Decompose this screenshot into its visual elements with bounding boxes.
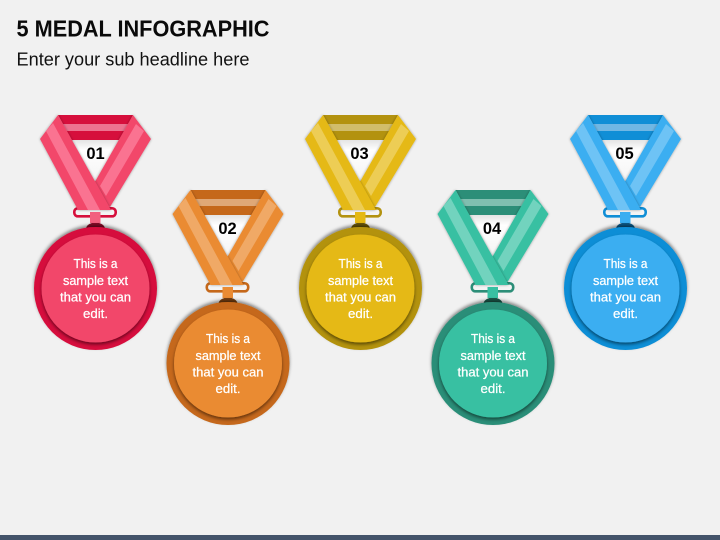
footer bar [0, 535, 720, 540]
medal text 04: edit. [480, 381, 506, 396]
medal text 05: that you can [590, 290, 661, 304]
medal text 02: edit. [216, 381, 240, 396]
medal 02 orange [166, 190, 290, 425]
medal text 02: that you can [192, 364, 264, 380]
medal text 04: sample text [460, 348, 526, 363]
medal 04 green [432, 190, 554, 425]
medal text 01: edit. [83, 306, 108, 321]
number 04: 04 [483, 220, 502, 238]
medal 01 red [34, 115, 157, 350]
medal text 01: that you can [60, 290, 131, 304]
medal 05 blue [564, 115, 687, 350]
medal text 03 [325, 256, 396, 321]
medal text 03: This is a [338, 256, 383, 271]
ribbon 02 [172, 190, 284, 291]
medal text 02: This is a [206, 331, 251, 346]
medal text 05: sample text [593, 273, 658, 288]
number 02: 02 [218, 220, 237, 238]
medal 03 yellow [299, 115, 422, 350]
medal text 05: edit. [613, 306, 638, 321]
medal disc 04 [432, 287, 554, 425]
number 03: 03 [350, 145, 369, 163]
title: 5 MEDAL INFOGRAPHIC [16, 16, 270, 42]
medal text 02 [192, 331, 264, 396]
medal disc 01 [34, 212, 157, 350]
medal text 02: sample text [196, 348, 261, 363]
medal text 03: that you can [325, 290, 396, 304]
medal text 05: This is a [604, 256, 648, 271]
number 05: 05 [615, 145, 634, 163]
medal text 01: sample text [63, 273, 128, 288]
medal disc 03 [299, 212, 422, 350]
medal disc 05 [564, 212, 687, 350]
medal text 03: sample text [328, 273, 393, 288]
medal text 01 [60, 256, 131, 321]
medal text 05 [590, 256, 661, 321]
number 01: 01 [86, 145, 105, 163]
medal text 04: that you can [458, 364, 528, 380]
ribbon 05 [570, 115, 681, 216]
medal text 03: edit. [348, 306, 373, 321]
ribbon 03 [305, 115, 416, 216]
ribbon 01 [40, 115, 151, 216]
subtitle: Enter your sub headline here [16, 50, 250, 70]
ribbon 04 [438, 190, 548, 291]
medal text 04: This is a [471, 331, 516, 346]
medal disc 02 [166, 287, 290, 425]
medal text 04 [458, 331, 528, 396]
medal text 01: This is a [74, 256, 118, 271]
